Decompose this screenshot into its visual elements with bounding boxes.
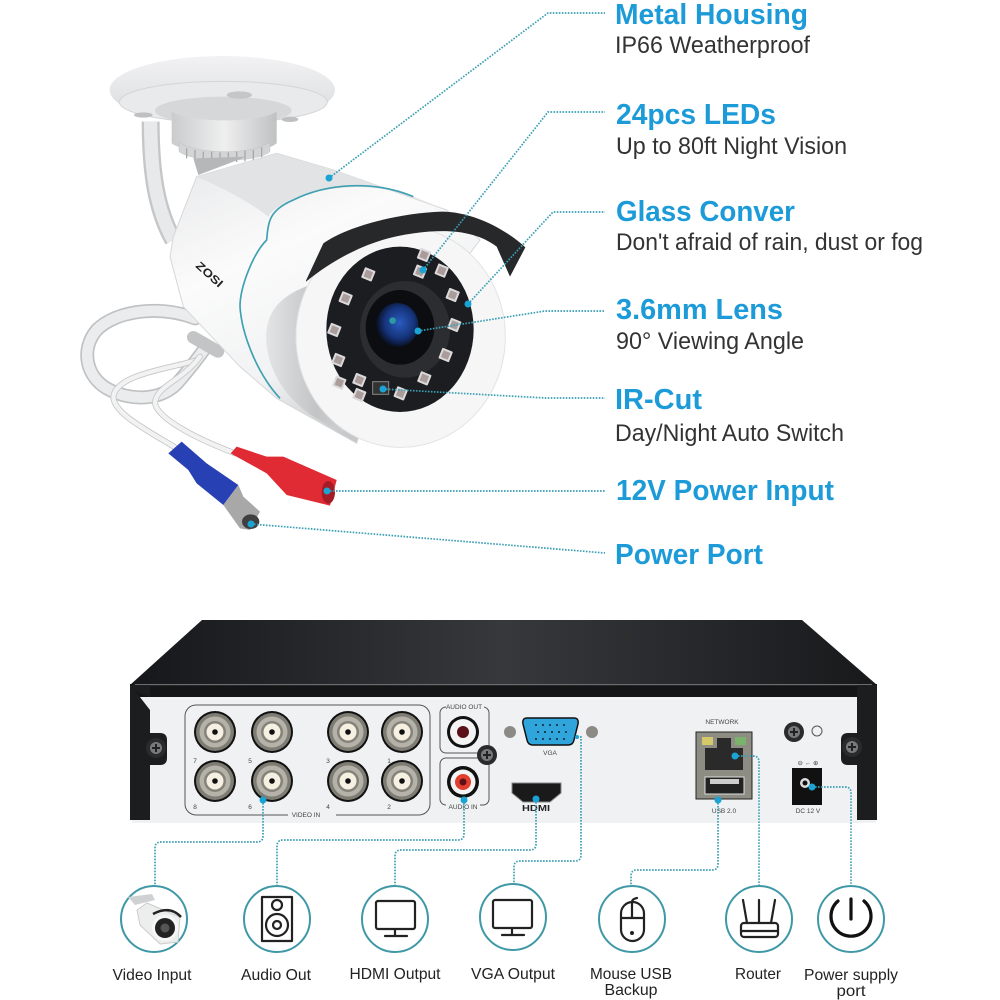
right bracket — [841, 685, 877, 820]
audio out — [440, 703, 489, 753]
DVR connector lines — [155, 735, 851, 885]
feature: Glass Conver: Glass Conver — [616, 196, 795, 228]
leader lines — [248, 13, 605, 553]
body seam — [240, 186, 413, 398]
icon: mouse — [599, 886, 665, 952]
feature: 24pcs LEDs — [616, 99, 847, 160]
audio in: AUDIO IN — [449, 804, 478, 811]
bracket cable — [151, 122, 173, 240]
DC jack: ⊖ ← ⊕ — [797, 760, 819, 767]
leader: metal housing — [326, 13, 605, 182]
video in group: 5 — [248, 758, 252, 765]
label: Router: Router — [735, 966, 782, 983]
icon labels — [112, 966, 898, 1000]
leader: LEDs — [420, 112, 605, 274]
label: Mouse USB Backup: Backup — [604, 982, 658, 999]
icon: power — [818, 886, 884, 952]
label: Power supply port: port — [836, 983, 866, 1000]
threaded neck — [172, 112, 277, 175]
mount base — [110, 56, 335, 125]
panel screw — [477, 745, 497, 765]
line: audio out — [277, 796, 468, 885]
network and USB ports: USB 2.0 — [712, 808, 736, 815]
IR board — [326, 247, 474, 412]
left bracket — [130, 685, 167, 820]
feature: IR-Cut: Day/Night Auto Switch — [615, 420, 844, 447]
label: Mouse USB Backup — [590, 966, 672, 999]
bottom icons row — [121, 884, 884, 952]
audio in — [440, 758, 489, 811]
leader: glass cover — [464, 212, 605, 308]
leader: power port — [248, 520, 605, 553]
blue connector — [168, 442, 260, 530]
front collar — [266, 285, 367, 432]
body top face — [197, 153, 447, 217]
label: Audio Out: Audio Out — [241, 967, 312, 984]
feature: 12V Power Input: 12V Power Input — [616, 475, 834, 507]
label: VGA Output: VGA Output — [471, 966, 556, 983]
feature: 3.6mm Lens: 3.6mm Lens — [616, 294, 783, 326]
DC jack: DC 12 V — [796, 808, 821, 815]
IR sensor — [373, 382, 389, 394]
icon: router — [726, 886, 792, 952]
icon: VGA output — [480, 884, 546, 950]
feature text — [615, 0, 923, 571]
feature: 24pcs LEDs: 24pcs LEDs — [616, 99, 776, 131]
line: router — [732, 752, 759, 885]
feature: Power Port: Power Port — [615, 539, 763, 571]
video in group: 1 — [387, 758, 391, 765]
sun shroud — [306, 212, 525, 282]
video in group: VIDEO IN — [292, 812, 321, 819]
VGA port: VGA — [543, 750, 558, 757]
video in group: 2 — [387, 804, 391, 811]
line: mouse USB — [631, 796, 722, 885]
DC jack — [792, 760, 822, 815]
feature: Glass Conver: Don't afraid of rain, dust or fog — [616, 229, 923, 256]
feature: Metal Housing — [615, 0, 810, 59]
VGA port — [504, 718, 598, 757]
line: VGA output — [514, 735, 581, 884]
network and USB ports: NETWORK — [705, 719, 739, 726]
line: video input — [155, 796, 266, 885]
icon: HDMI output — [362, 886, 428, 952]
ZOSI logo: ZOSI — [193, 260, 225, 290]
IR LEDs — [327, 248, 462, 402]
feature: Glass Conver — [616, 196, 923, 256]
feature: 3.6mm Lens: 90° Viewing Angle — [616, 328, 804, 355]
video in group: 3 — [326, 758, 330, 765]
audio out: AUDIO OUT — [446, 704, 482, 711]
video in group: 6 — [248, 804, 252, 811]
DVR top cover — [130, 620, 877, 697]
label: Video Input: Video Input — [112, 967, 192, 984]
HDMI port — [512, 783, 561, 813]
line: power supply — [808, 784, 851, 885]
label: Mouse USB Backup: Mouse USB — [590, 966, 672, 983]
feature: 3.6mm Lens — [616, 294, 804, 355]
video in group: 8 — [193, 804, 197, 811]
label: Power supply port — [804, 967, 898, 1000]
leader: lens — [414, 311, 605, 334]
feature: IR-Cut — [615, 384, 844, 447]
label: HDMI Output: HDMI Output — [350, 966, 441, 983]
feature: Metal Housing: IP66 Weatherproof — [615, 32, 810, 59]
feature: 24pcs LEDs: Up to 80ft Night Vision — [616, 133, 847, 160]
label: Power supply port: Power supply — [804, 967, 898, 984]
HDMI port: HDMI — [522, 804, 550, 813]
video in group — [185, 705, 430, 820]
icon: video input — [121, 886, 187, 952]
ground screw — [784, 722, 822, 742]
line: HDMI output — [395, 796, 540, 885]
leader: 12V input — [324, 488, 605, 494]
network and USB ports — [696, 719, 752, 815]
front face — [296, 226, 505, 447]
camera illustration — [87, 56, 525, 530]
video in group: 7 — [193, 758, 197, 765]
DVR back panel — [132, 697, 876, 823]
camera body — [170, 153, 480, 443]
feature: IR-Cut: IR-Cut — [615, 384, 702, 416]
lens — [360, 281, 450, 378]
leader: IR cut — [380, 386, 605, 398]
icon: audio out — [244, 886, 310, 952]
video in group: 4 — [326, 804, 330, 811]
red connector — [231, 447, 337, 506]
DVR recorder — [130, 620, 877, 823]
camera cables — [87, 311, 235, 453]
